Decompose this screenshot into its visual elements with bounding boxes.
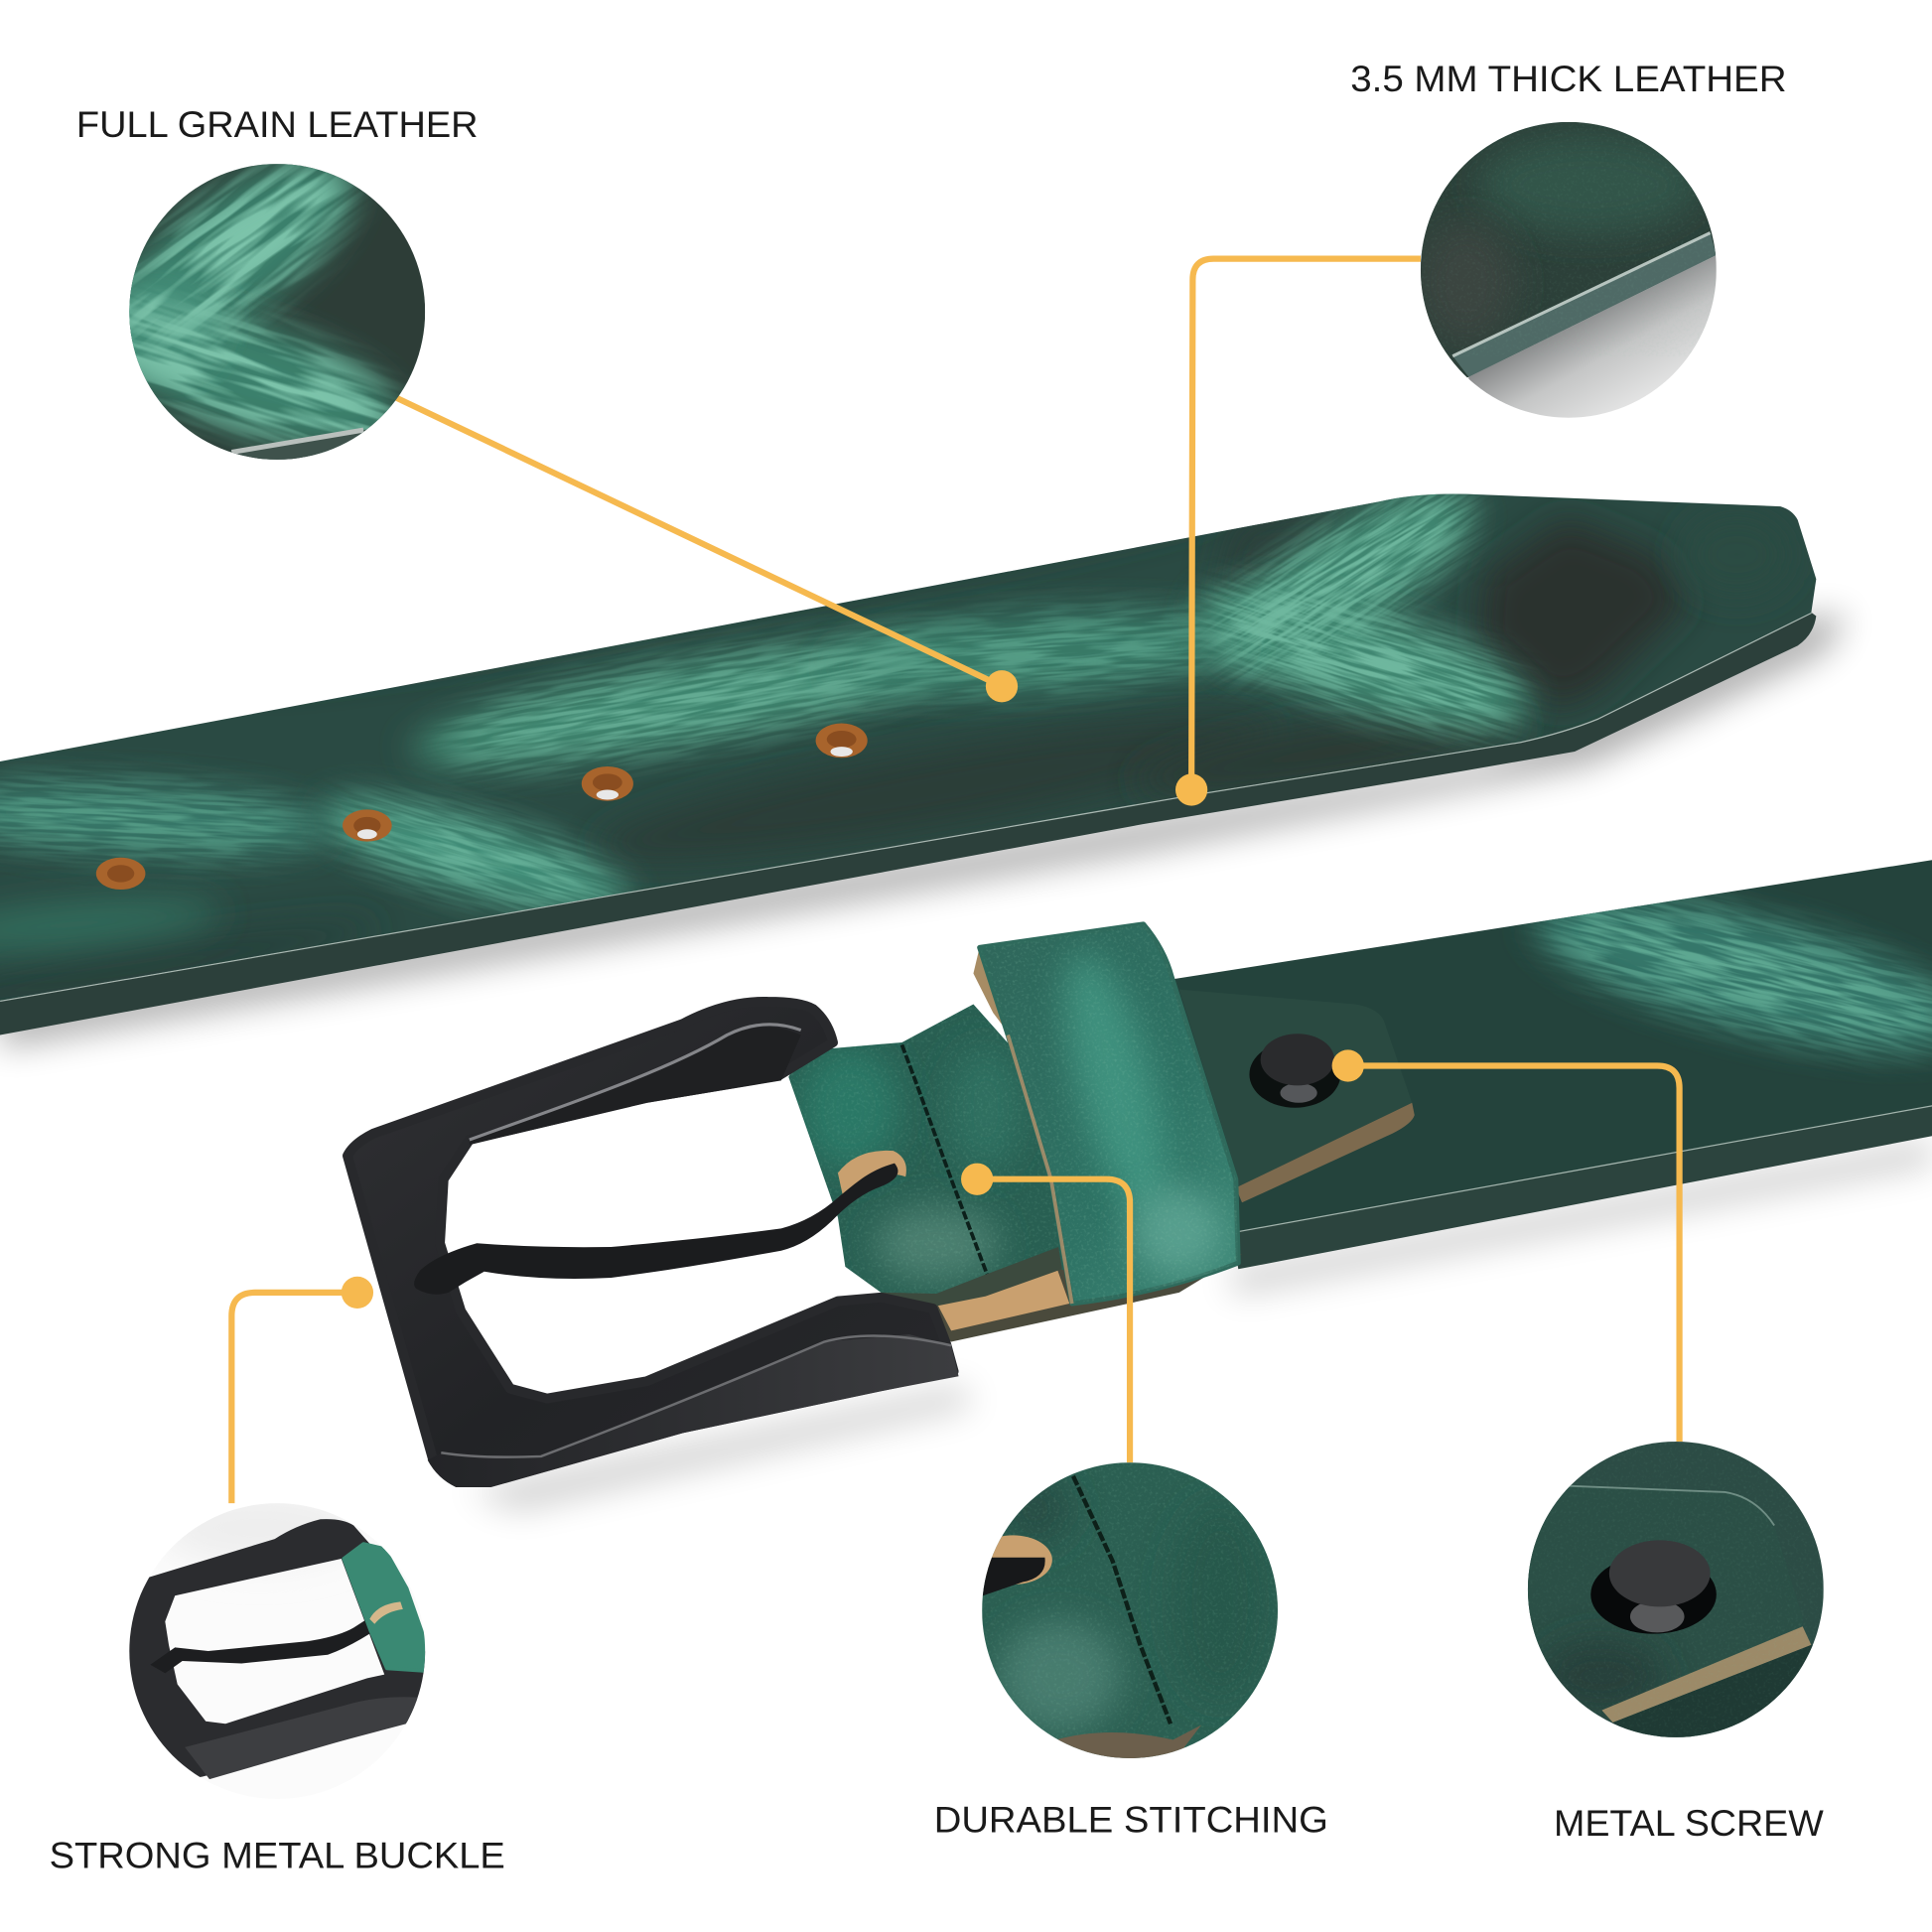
callout line: thick leather [1175, 259, 1421, 806]
belt keeper loop [973, 921, 1241, 1307]
black metal buckle [347, 1002, 973, 1509]
detail circle: leather edge thickness [1417, 122, 1717, 425]
folded leather behind the buckle [776, 998, 1242, 1342]
lower belt strap [1171, 860, 1932, 1294]
rounded strap end with metal screw [1179, 990, 1415, 1202]
detail circle: buckle [129, 1503, 425, 1779]
detail circle: leather grain [129, 164, 425, 460]
label: strong metal buckle: STRONG METAL BUCKLE [50, 1834, 505, 1875]
callout line: stitching [961, 1164, 1130, 1462]
label: durable stitching: DURABLE STITCHING [934, 1798, 1328, 1840]
callout line: buckle [231, 1277, 373, 1503]
belt holes [96, 724, 868, 890]
detail circle: stitching [973, 1462, 1278, 1762]
callout line: full grain leather [397, 398, 1018, 702]
label: thick leather: 3.5 MM THICK LEATHER [1350, 58, 1787, 99]
label: metal screw: METAL SCREW [1554, 1802, 1824, 1844]
label: full grain leather: FULL GRAIN LEATHER [76, 103, 479, 145]
callout line: metal screw [1332, 1049, 1680, 1442]
detail circle: screw [1522, 1442, 1836, 1743]
long belt strap with tip [0, 459, 1849, 1047]
